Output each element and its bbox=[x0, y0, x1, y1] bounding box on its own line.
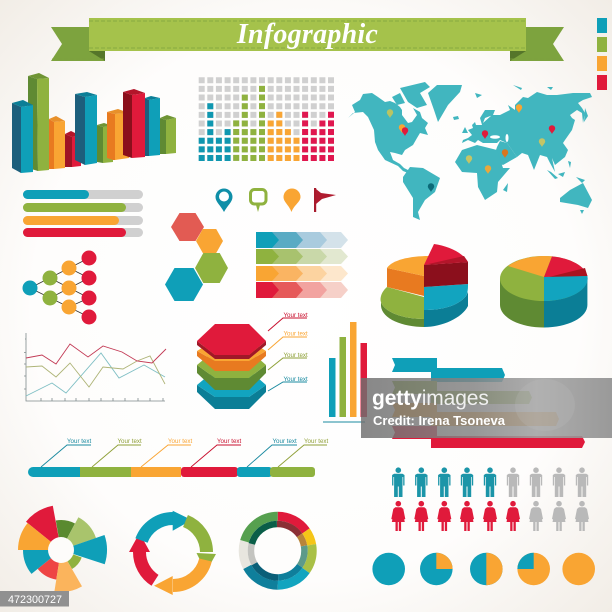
timeline callout labels: Your text bbox=[67, 438, 91, 445]
map location pins bbox=[387, 104, 555, 192]
radial wedge chart bbox=[18, 506, 107, 592]
timeline bar bbox=[28, 467, 315, 477]
watermark logo text: gettyimages bbox=[372, 387, 489, 410]
pixel grid column chart bbox=[202, 77, 331, 161]
male pictogram row bbox=[392, 467, 588, 497]
world map bbox=[348, 82, 592, 220]
timeline callout labels: Your text bbox=[217, 438, 241, 445]
chevron table bbox=[256, 232, 348, 298]
timeline callout labels: Your text bbox=[304, 438, 328, 445]
layered hexagon stack bbox=[197, 324, 266, 409]
timeline callout labels: Your text bbox=[118, 438, 142, 445]
timeline callout labels: Your text bbox=[168, 438, 192, 445]
segmented donut chart bbox=[243, 516, 312, 585]
stack callout labels: Your text bbox=[284, 352, 308, 359]
circular arrows cycle bbox=[129, 511, 216, 595]
3D pie solid bbox=[500, 256, 588, 328]
line chart bbox=[24, 333, 166, 401]
image id tag bbox=[0, 591, 69, 606]
watermark credit text: Credit: Irena Tsoneva bbox=[373, 413, 506, 428]
stack callout labels: Your text bbox=[284, 312, 308, 319]
3D bar chart bbox=[12, 73, 176, 173]
icon: green speech marker bbox=[250, 190, 266, 212]
vertical bar chart bbox=[323, 322, 367, 422]
image id tag: 472300727 bbox=[8, 594, 62, 606]
colour legend swatches bbox=[597, 18, 607, 90]
node tree diagram bbox=[22, 250, 96, 324]
stack callout labels: Your text bbox=[284, 330, 308, 338]
title text: Infographic bbox=[236, 19, 378, 50]
icon: red flag bbox=[314, 188, 336, 212]
icon: teal map pin bbox=[216, 188, 232, 212]
stack callout labels: Your text bbox=[284, 376, 308, 383]
proportion pie row bbox=[372, 553, 595, 585]
progress bars bbox=[23, 190, 143, 237]
icon: orange pin bbox=[284, 188, 300, 212]
female pictogram row bbox=[391, 501, 589, 531]
3D pie exploded bbox=[381, 244, 468, 327]
hexagon cluster bbox=[165, 213, 228, 301]
timeline callout labels bbox=[41, 438, 328, 467]
timeline callout labels: Your text bbox=[272, 438, 297, 445]
stack callout labels bbox=[268, 312, 308, 391]
watermark band bbox=[361, 378, 612, 438]
stepped ribbon banners bbox=[392, 358, 585, 448]
title ribbon bbox=[51, 18, 564, 61]
